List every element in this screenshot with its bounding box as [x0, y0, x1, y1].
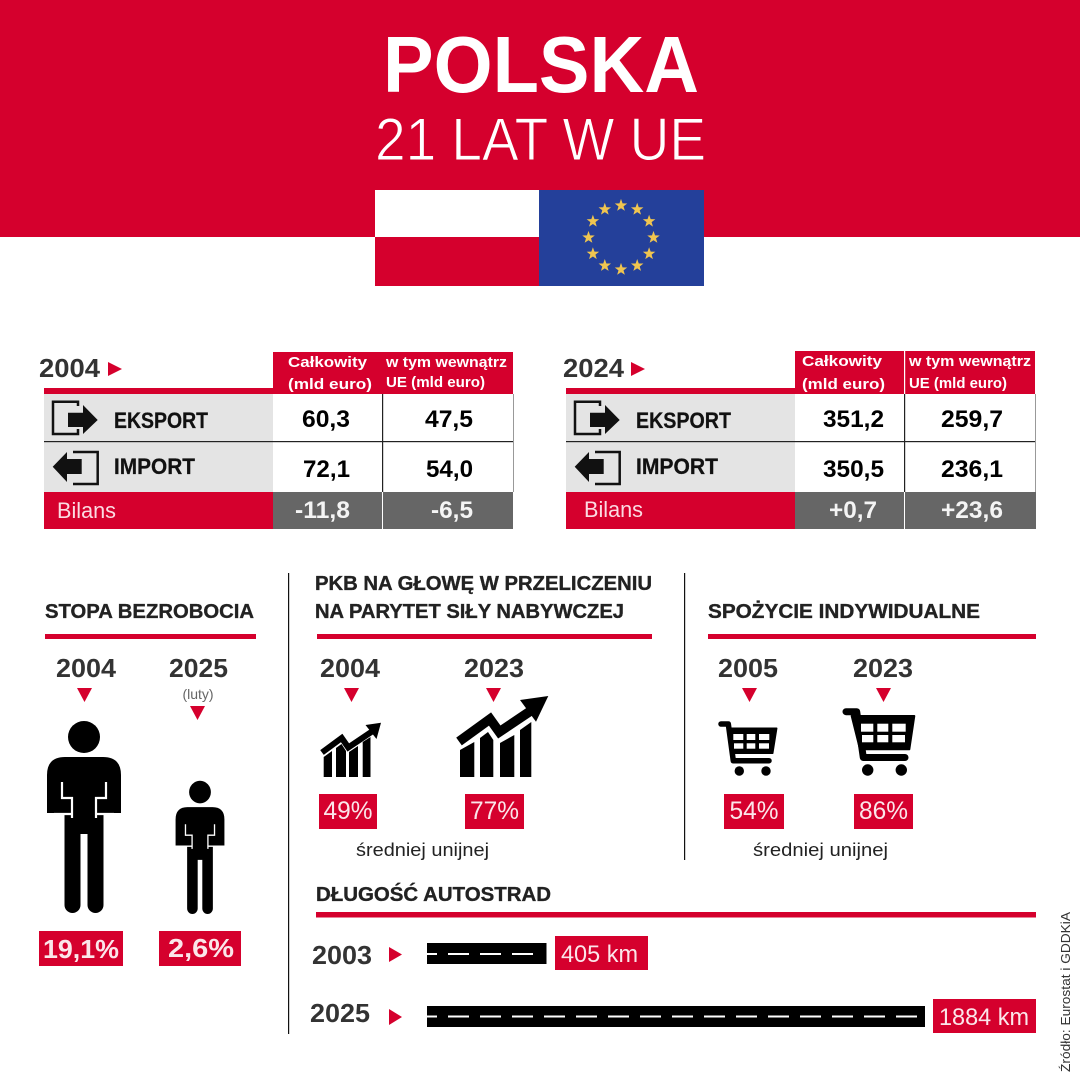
table header: (mld euro)	[288, 376, 372, 393]
caption: średniej unijnej	[753, 840, 888, 860]
heading: motorways: DŁUGOŚĆ AUTOSTRAD	[316, 882, 551, 906]
arrow marker 2024	[631, 362, 645, 376]
marker 2003	[389, 947, 402, 962]
flags: Poland and EU	[375, 190, 704, 286]
value badge 54%	[724, 794, 784, 829]
panel: trade table 2024	[563, 351, 1036, 529]
value badge 2,6%: 2,6%	[168, 933, 234, 963]
heading rule	[45, 634, 256, 639]
year 2005: 2005	[718, 653, 778, 683]
arrow marker 2004	[108, 362, 122, 376]
note: luty: (luty)	[182, 686, 214, 702]
caption: średniej unijnej	[356, 840, 489, 860]
subtitle: 21 LAT W UE	[375, 106, 706, 173]
value badge 405 km	[555, 936, 648, 970]
icon: export	[53, 402, 98, 434]
label: eksport: EKSPORT	[114, 408, 208, 433]
marker 2023	[876, 688, 891, 702]
year heading 2004: 2004	[39, 353, 101, 383]
label: import: IMPORT	[114, 454, 196, 479]
value badge 405 km: 405 km	[561, 941, 638, 968]
icon: cart small	[721, 724, 777, 776]
title: POLSKA	[383, 20, 699, 109]
heading: consumption: SPOŻYCIE INDYWIDUALNE	[708, 600, 980, 623]
value: import UE 2004: 54,0	[426, 456, 473, 483]
value badge 86%	[854, 794, 913, 829]
value badge 86%: 86%	[859, 797, 908, 825]
year 2023: 2023	[853, 653, 913, 683]
value: eksport UE 2004: 47,5	[425, 406, 473, 433]
panel: GDP per capita	[315, 573, 652, 860]
heading: GDP	[315, 573, 652, 623]
balance row: +23,6	[941, 497, 1003, 524]
value: eksport 2024: 351,2	[823, 406, 884, 433]
marker 2025	[190, 706, 205, 720]
value badge 49%: 49%	[324, 797, 372, 825]
label: import: IMPORT	[636, 454, 719, 479]
heading rule	[317, 634, 652, 639]
table header	[566, 351, 1035, 394]
header band	[0, 0, 1080, 237]
table header: w tym wewnątrz	[385, 354, 507, 371]
icon: export	[575, 402, 620, 434]
marker 2005	[742, 688, 757, 702]
balance row: -11,8	[295, 497, 350, 524]
road 2025	[427, 1006, 925, 1027]
year 2004: 2004	[56, 653, 117, 683]
icon: import	[53, 452, 98, 484]
road 2003	[427, 943, 546, 964]
table header: (mld euro)	[802, 376, 885, 393]
table header: UE (mld euro)	[386, 374, 485, 391]
panel: trade table 2004	[39, 352, 514, 529]
value badge 77%	[465, 794, 524, 829]
marker 2004	[344, 688, 359, 702]
year 2025: 2025	[310, 998, 370, 1028]
icon: person large	[47, 721, 121, 913]
panel: individual consumption	[708, 600, 1036, 860]
balance row: +0,7	[829, 497, 877, 524]
value badge 49%	[319, 794, 377, 829]
vertical divider left	[288, 573, 289, 1034]
balance row	[566, 492, 1036, 529]
marker 2025	[389, 1009, 402, 1025]
table header: w tym wewnątrz	[908, 353, 1031, 370]
year 2004: 2004	[320, 653, 381, 683]
heading rule	[316, 912, 1036, 918]
value badge 77%: 77%	[470, 797, 519, 825]
balance row	[44, 492, 513, 529]
year 2025: 2025	[169, 653, 228, 683]
year heading 2024: 2024	[563, 353, 625, 383]
heading rule	[708, 634, 1036, 639]
icon: cart large	[846, 712, 914, 776]
marker 2004	[77, 688, 92, 702]
label: eksport: EKSPORT	[636, 408, 731, 433]
vertical divider right	[684, 573, 685, 860]
heading: GDP: NA PARYTET SIŁY NABYWCZEJ	[315, 601, 624, 623]
table header: UE (mld euro)	[909, 375, 1007, 392]
icon: person small	[176, 781, 224, 914]
value: import 2024: 350,5	[823, 456, 884, 483]
balance row: Bilans	[584, 497, 643, 522]
table header: Całkowity	[802, 353, 883, 370]
table header: Całkowity	[288, 354, 368, 371]
source note: Źródło: Eurostat i GDDKiA	[1058, 911, 1073, 1072]
value badge 19,1%: 19,1%	[43, 934, 119, 964]
balance row: Bilans	[57, 498, 116, 523]
heading: unemployment: STOPA BEZROBOCIA	[45, 601, 254, 623]
heading: GDP: PKB NA GŁOWĘ W PRZELICZENIU	[315, 573, 652, 595]
panel: motorway length	[310, 882, 1036, 1033]
panel: unemployment	[39, 601, 256, 966]
marker 2023	[486, 688, 501, 702]
icon: import	[575, 452, 620, 484]
balance row: -6,5	[431, 497, 473, 524]
year 2003: 2003	[312, 940, 372, 970]
row backgrounds	[44, 394, 514, 492]
value: import UE 2024: 236,1	[941, 456, 1003, 483]
value badge 2,6%	[159, 931, 241, 966]
table header	[44, 352, 513, 394]
row backgrounds	[566, 394, 1036, 492]
value: import 2004: 72,1	[303, 456, 350, 483]
value: eksport UE 2024: 259,7	[941, 406, 1003, 433]
value: eksport 2004: 60,3	[302, 406, 350, 433]
value badge 54%: 54%	[730, 797, 778, 825]
icon: growth chart large	[459, 696, 548, 777]
icon: growth chart small	[322, 723, 381, 777]
year 2023: 2023	[464, 653, 524, 683]
value badge 1884 km: 1884 km	[939, 1004, 1029, 1031]
